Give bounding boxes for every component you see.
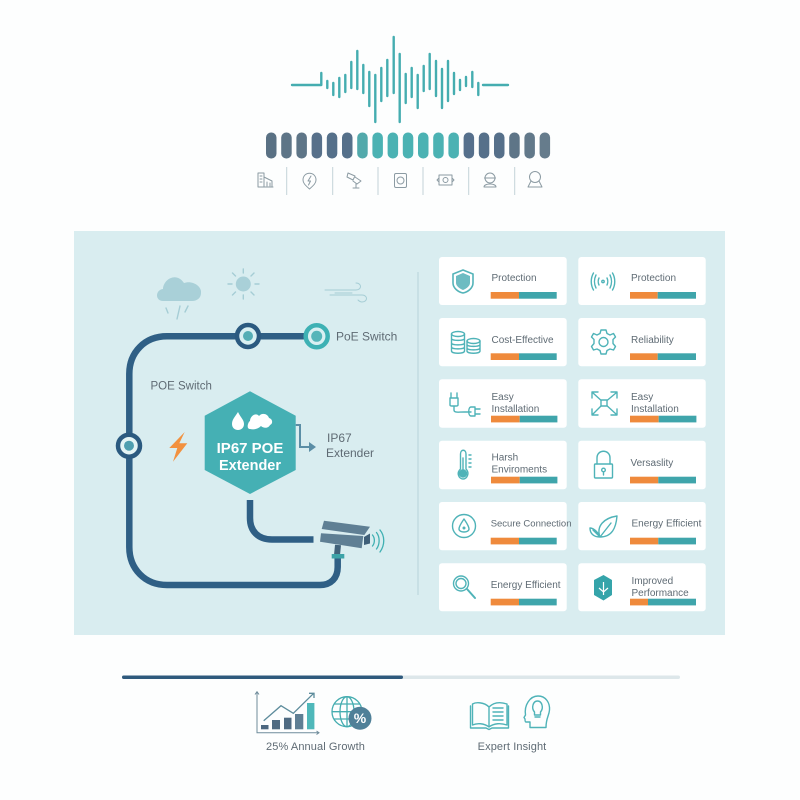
card: Harsh Enviroments: Enviroments <box>492 464 547 476</box>
hexagon: IP67 POE Extender <box>205 391 296 494</box>
icon: security camera <box>347 173 361 188</box>
rating bar <box>491 599 557 605</box>
divider <box>417 272 419 595</box>
icon: globe percent <box>332 697 372 730</box>
arrow: to IP67 Extender <box>296 425 316 452</box>
waveform <box>292 37 508 122</box>
card: Reliability <box>578 318 706 366</box>
card: Easy Installation right: Installation <box>631 404 679 415</box>
node: PoE switch <box>306 325 328 347</box>
icon: building <box>258 173 273 187</box>
icon: thermometer <box>458 450 471 479</box>
progress bar <box>122 676 680 679</box>
card: Reliability: Reliability <box>631 335 674 346</box>
card: Secure Connection <box>439 502 572 550</box>
card: Improved Performance: Performance <box>632 588 689 599</box>
card: Versaslity <box>578 441 706 489</box>
card: Improved Performance <box>578 563 706 611</box>
card: Easy Installation left <box>439 379 567 428</box>
icon: lightning bolt <box>169 432 187 462</box>
node: top <box>237 325 259 347</box>
rating bar <box>630 477 696 483</box>
rating bar <box>630 599 696 605</box>
segmented pill bar <box>266 132 550 158</box>
icon: shield <box>453 270 473 293</box>
label: IP67 Extender: Extender <box>326 446 374 460</box>
icon: circled lock <box>452 514 476 538</box>
card: Easy Installation right: Easy <box>631 392 653 403</box>
card: Protection left <box>439 257 567 305</box>
icon: growth chart <box>255 692 319 734</box>
rating bar <box>630 416 696 422</box>
caption: 25% Annual Growth: 25% Annual Growth <box>266 741 365 753</box>
icon: ticket <box>437 175 454 185</box>
icon: camera <box>320 521 384 558</box>
icon: support person <box>484 173 496 187</box>
rating bar <box>630 353 696 360</box>
rating bar <box>630 538 696 544</box>
icon: device <box>394 174 406 188</box>
label: IP67 Extender <box>326 431 374 460</box>
icon: signal <box>591 273 615 290</box>
rating bar <box>491 477 557 483</box>
icon: water drop <box>232 412 244 430</box>
card: Versaslity: Versaslity <box>630 458 673 469</box>
top icon row <box>258 167 542 195</box>
icon: hexagon badge <box>594 575 612 600</box>
card: Energy Efficient left: Energy Efficient <box>491 580 561 591</box>
card: Easy Installation right <box>578 379 706 428</box>
caption: Expert Insight: Expert Insight <box>478 741 546 753</box>
card: Improved Performance: Improved <box>632 576 673 587</box>
node: left <box>118 435 140 457</box>
card: Secure Connection: Secure Connection <box>491 519 572 530</box>
icon: gear <box>592 330 616 354</box>
card: Protection right: Protection <box>631 273 676 284</box>
icon: rain cloud <box>157 277 201 319</box>
card: Harsh Enviroments: Harsh <box>492 452 518 464</box>
label: IP67 Extender: IP67 <box>327 431 352 445</box>
rating bar <box>491 292 557 299</box>
rating bar <box>491 416 557 422</box>
icon: pin <box>303 173 316 189</box>
icon: open book <box>470 703 508 730</box>
icon: head with bulb <box>524 696 550 728</box>
icon: globe percent: % <box>354 710 367 726</box>
hexagon title: IP67 POE <box>217 440 283 457</box>
card: Protection left: Protection <box>492 273 537 284</box>
icon: network arrows <box>592 392 617 415</box>
rating bar <box>491 353 557 360</box>
icon: dust cloud <box>248 414 272 429</box>
card: Protection right <box>578 257 706 305</box>
label: POE Switch: POE Switch <box>150 380 212 392</box>
card: Harsh Enviroments <box>439 441 567 489</box>
icon: wind <box>325 283 366 302</box>
cable: extender to camera <box>250 500 314 540</box>
icon: leaf <box>590 516 617 537</box>
cable loop <box>118 325 338 585</box>
card: Cost-Effective: Cost-Effective <box>492 335 554 346</box>
icon: plugs <box>450 393 480 416</box>
card: Energy Efficient right <box>578 502 706 550</box>
rating bar <box>491 538 557 544</box>
card: Easy Installation left: Easy <box>492 392 514 403</box>
card: Energy Efficient left <box>439 563 567 611</box>
weather icons <box>157 269 366 319</box>
icon: coins <box>452 332 480 353</box>
main panel <box>74 231 725 635</box>
hexagon subtitle: Extender <box>219 458 281 474</box>
label: PoE Switch: PoE Switch <box>336 330 397 344</box>
card: Cost-Effective <box>439 318 567 366</box>
icon: sun <box>228 269 259 299</box>
icon: magnifier <box>454 576 475 598</box>
card: Easy Installation left: Installation <box>492 404 539 415</box>
icon: padlock <box>594 451 612 478</box>
icon: user <box>528 172 542 187</box>
rating bar <box>630 292 696 299</box>
card: Energy Efficient right: Energy Efficient <box>632 519 702 530</box>
